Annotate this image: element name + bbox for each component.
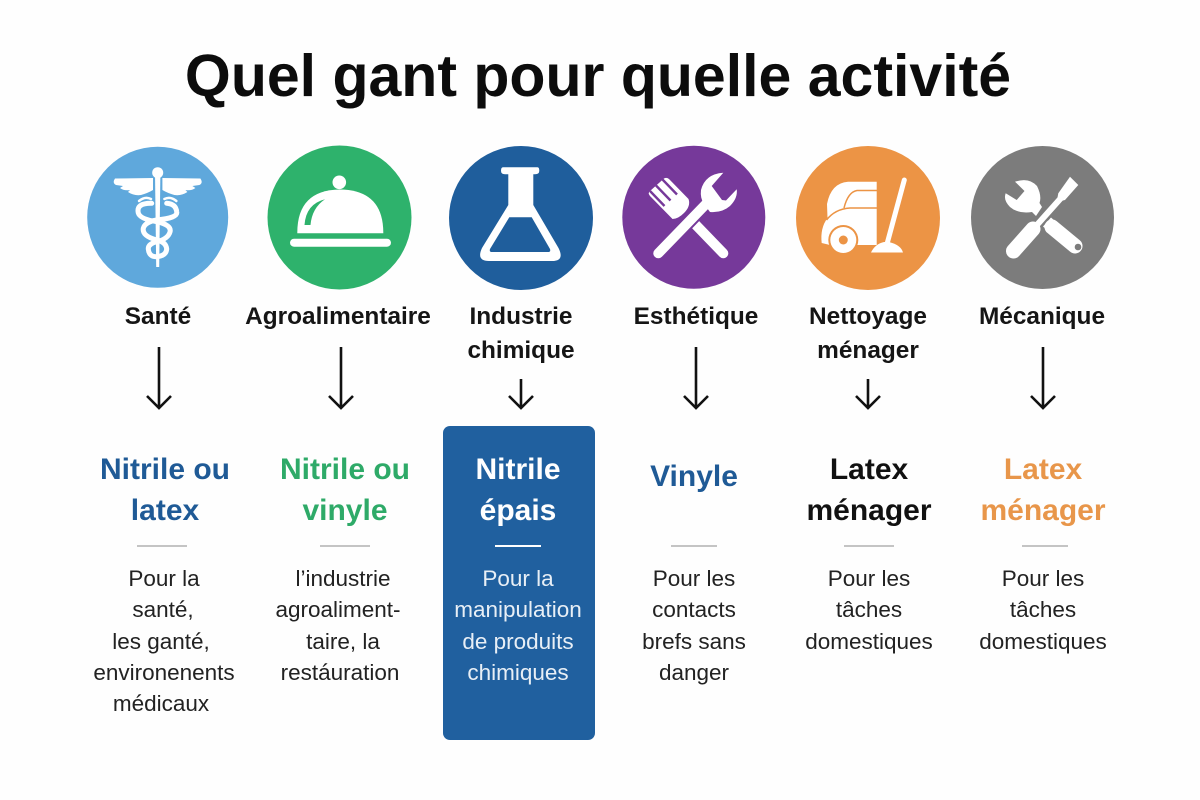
arrow: Esthétique xyxy=(683,347,709,410)
description: chimique xyxy=(454,566,582,685)
label: Esthétique: Esthétique xyxy=(634,303,758,330)
icon: fork and wrench xyxy=(622,146,766,289)
description: esthétique: danger xyxy=(659,660,729,685)
arrow: Santé xyxy=(146,347,172,410)
icon: wrench and screwdriver xyxy=(971,146,1114,289)
description: agroalimentaire: l’industrie xyxy=(295,566,391,591)
description: chimique: de produits xyxy=(462,629,574,654)
glove: Latex ménager xyxy=(806,453,932,527)
glove: Latex ménager: ménager xyxy=(806,494,932,527)
icon: health caduceus xyxy=(87,146,228,288)
description: nettoyage: tâches xyxy=(836,597,902,622)
description: santé xyxy=(93,566,235,716)
glove: Nitrile épais: Nitrile xyxy=(475,453,561,486)
title: Quel gant pour quelle activité xyxy=(185,43,1011,109)
description: agroalimentaire xyxy=(275,566,401,685)
description: chimique: manipulation xyxy=(454,597,582,622)
description: nettoyage: Pour les xyxy=(828,566,910,591)
icon: cleaning cart and mop xyxy=(796,146,940,290)
icon: food cloche xyxy=(268,146,412,290)
panel: highlighted chemical card xyxy=(443,426,595,740)
glove: Nitrile ou vinyle: Nitrile ou xyxy=(280,453,410,486)
fork tine gaps xyxy=(650,180,677,206)
description: agroalimentaire: agroaliment- xyxy=(275,597,401,622)
description: santé: Pour la xyxy=(128,566,200,591)
icon: chemical flask xyxy=(449,146,593,290)
description: mécanique: domestiques xyxy=(979,629,1107,654)
label: Agroalimentaire: Agroalimentaire xyxy=(245,303,431,330)
label: Nettoyage ménager: Nettoyage xyxy=(809,303,927,330)
description: nettoyage xyxy=(805,566,933,654)
glove: Nitrile épais xyxy=(475,453,561,527)
description: chimique: Pour la xyxy=(482,566,554,591)
description: chimique: chimiques xyxy=(467,660,569,685)
description: santé: les ganté, xyxy=(112,629,210,654)
glove: Nitrile ou vinyle xyxy=(280,453,410,527)
description: mécanique: tâches xyxy=(1010,597,1076,622)
arrow: Nettoyage ménager xyxy=(855,379,881,410)
description: agroalimentaire: restáuration xyxy=(281,660,399,685)
glove: Latex ménager orange: Latex xyxy=(1004,453,1082,486)
description: santé: santé, xyxy=(132,597,194,622)
glove: Latex ménager orange: ménager xyxy=(980,494,1106,527)
glove: Nitrile épais: épais xyxy=(480,494,556,527)
description: santé: médicaux xyxy=(113,691,209,716)
description: agroalimentaire: taire, la xyxy=(306,629,380,654)
arrow: Mécanique xyxy=(1030,347,1056,410)
description: nettoyage: domestiques xyxy=(805,629,933,654)
glove: Nitrile ou latex: latex xyxy=(131,494,199,527)
label: Santé: Santé xyxy=(125,303,191,330)
label: Nettoyage ménager: ménager xyxy=(817,337,919,364)
glove: Latex ménager: Latex xyxy=(830,453,908,486)
glove: Nitrile ou latex xyxy=(100,453,230,527)
glove: Nitrile ou latex: Nitrile ou xyxy=(100,453,230,486)
glove: Latex ménager orange xyxy=(980,453,1106,527)
label: Industrie chimique xyxy=(467,303,575,364)
dome highlight xyxy=(304,199,325,225)
description: esthétique: brefs sans xyxy=(642,629,746,654)
description: santé: environenents xyxy=(93,660,235,685)
label: Industrie chimique: Industrie xyxy=(469,303,572,330)
description: esthétique: contacts xyxy=(652,597,736,622)
description: esthétique: Pour les xyxy=(653,566,735,591)
glove: Nitrile ou vinyle: vinyle xyxy=(302,494,388,527)
description: mécanique: Pour les xyxy=(1002,566,1084,591)
description: mécanique xyxy=(979,566,1107,654)
description: esthétique xyxy=(642,566,746,685)
arrow: Industrie chimique xyxy=(508,379,534,410)
label: Mécanique: Mécanique xyxy=(979,303,1105,330)
arrow: Agroalimentaire xyxy=(328,347,354,410)
label: Nettoyage ménager xyxy=(809,303,927,364)
glove: Vinyle: Vinyle xyxy=(650,460,738,493)
label: Industrie chimique: chimique xyxy=(467,337,575,364)
